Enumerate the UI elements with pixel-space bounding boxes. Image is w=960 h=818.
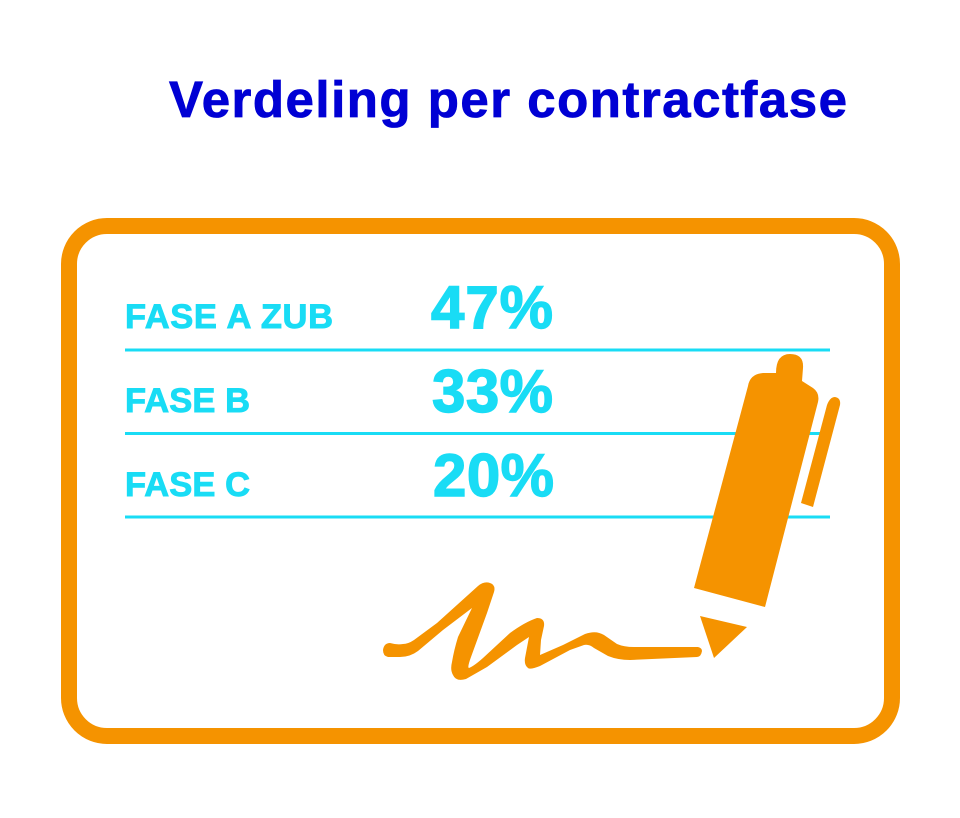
row: fase A ZUB: FASE A ZUB [125, 298, 333, 336]
row: fase C: FASE C [125, 466, 250, 504]
row: fase B: FASE B [125, 382, 250, 420]
row: fase C: 20% [433, 442, 554, 509]
row: fase B: 33% [432, 358, 553, 425]
icon: pen [694, 354, 840, 658]
row: fase A ZUB: 47% [431, 274, 553, 341]
panel: contract phases [69, 226, 892, 736]
title: Verdeling per contractfase [169, 71, 847, 128]
icon: signature [383, 582, 702, 680]
panel border [69, 226, 892, 736]
row: fase C [125, 442, 830, 518]
row: fase A ZUB [125, 274, 830, 352]
row: fase B [125, 358, 830, 435]
